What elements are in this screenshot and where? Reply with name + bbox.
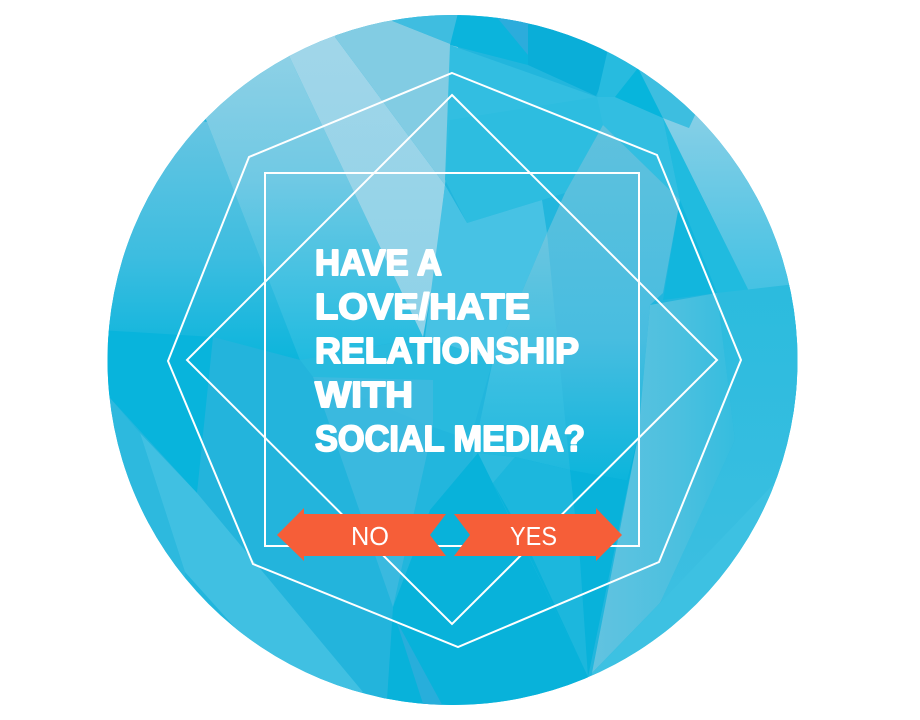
arrow: no: NO — [351, 521, 389, 551]
faceted blue circle — [100, 5, 830, 720]
heading: question: LOVE/HATE — [315, 286, 530, 327]
heading: question: WITH — [315, 374, 413, 415]
heading: question: RELATIONSHIP — [315, 330, 579, 371]
heading: question: SOCIAL MEDIA? — [315, 418, 585, 459]
octagon outline — [168, 73, 741, 647]
arrow: no — [277, 508, 446, 561]
infographic canvas — [108, 15, 798, 705]
arrow: yes — [454, 508, 622, 561]
heading: question — [315, 242, 585, 459]
diamond outline — [187, 95, 717, 624]
arrow: yes: YES — [510, 521, 557, 551]
square outline — [265, 173, 639, 546]
heading: question: HAVE A — [315, 242, 442, 283]
